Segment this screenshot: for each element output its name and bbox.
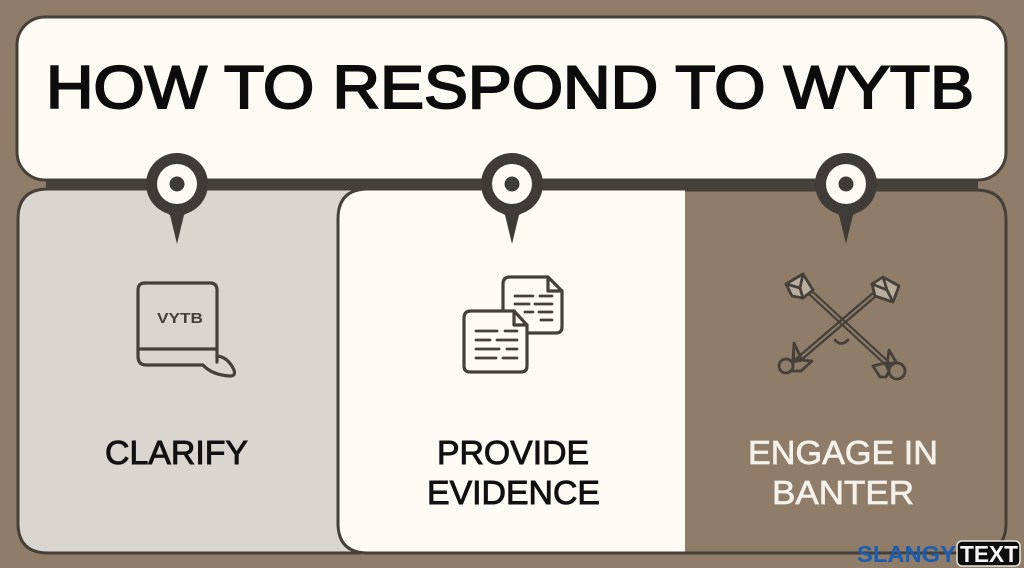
logo: slangytext: TEXT bbox=[960, 541, 1018, 567]
label: engage in banter: BANTER bbox=[772, 474, 914, 511]
panel: engage in banter bbox=[680, 190, 1006, 553]
label: engage in banter bbox=[748, 434, 938, 511]
icon: wytb book with speech tail: VYTB bbox=[157, 310, 203, 327]
label: provide evidence: EVIDENCE bbox=[427, 474, 600, 511]
pin marker 3 bbox=[815, 153, 877, 244]
icon: documents bbox=[464, 277, 562, 372]
title: HOW TO RESPOND TO WYTB bbox=[46, 54, 974, 121]
logo: slangytext bbox=[857, 541, 1020, 567]
label: provide evidence: PROVIDE bbox=[437, 434, 589, 471]
logo: slangytext: SLANGY bbox=[857, 541, 956, 567]
label: provide evidence bbox=[427, 434, 600, 511]
label: clarify: CLARIFY bbox=[105, 434, 248, 471]
panel: clarify bbox=[18, 189, 360, 553]
icon: wytb book with speech tail bbox=[138, 283, 234, 376]
label: engage in banter: ENGAGE IN bbox=[748, 434, 938, 471]
title banner bbox=[17, 17, 1006, 180]
connector bar bbox=[46, 179, 978, 189]
icon: crossed arrows bbox=[779, 274, 905, 379]
panel: provide evidence bbox=[338, 189, 685, 553]
pin marker 1 bbox=[146, 153, 208, 244]
pin marker 2 bbox=[481, 153, 543, 244]
